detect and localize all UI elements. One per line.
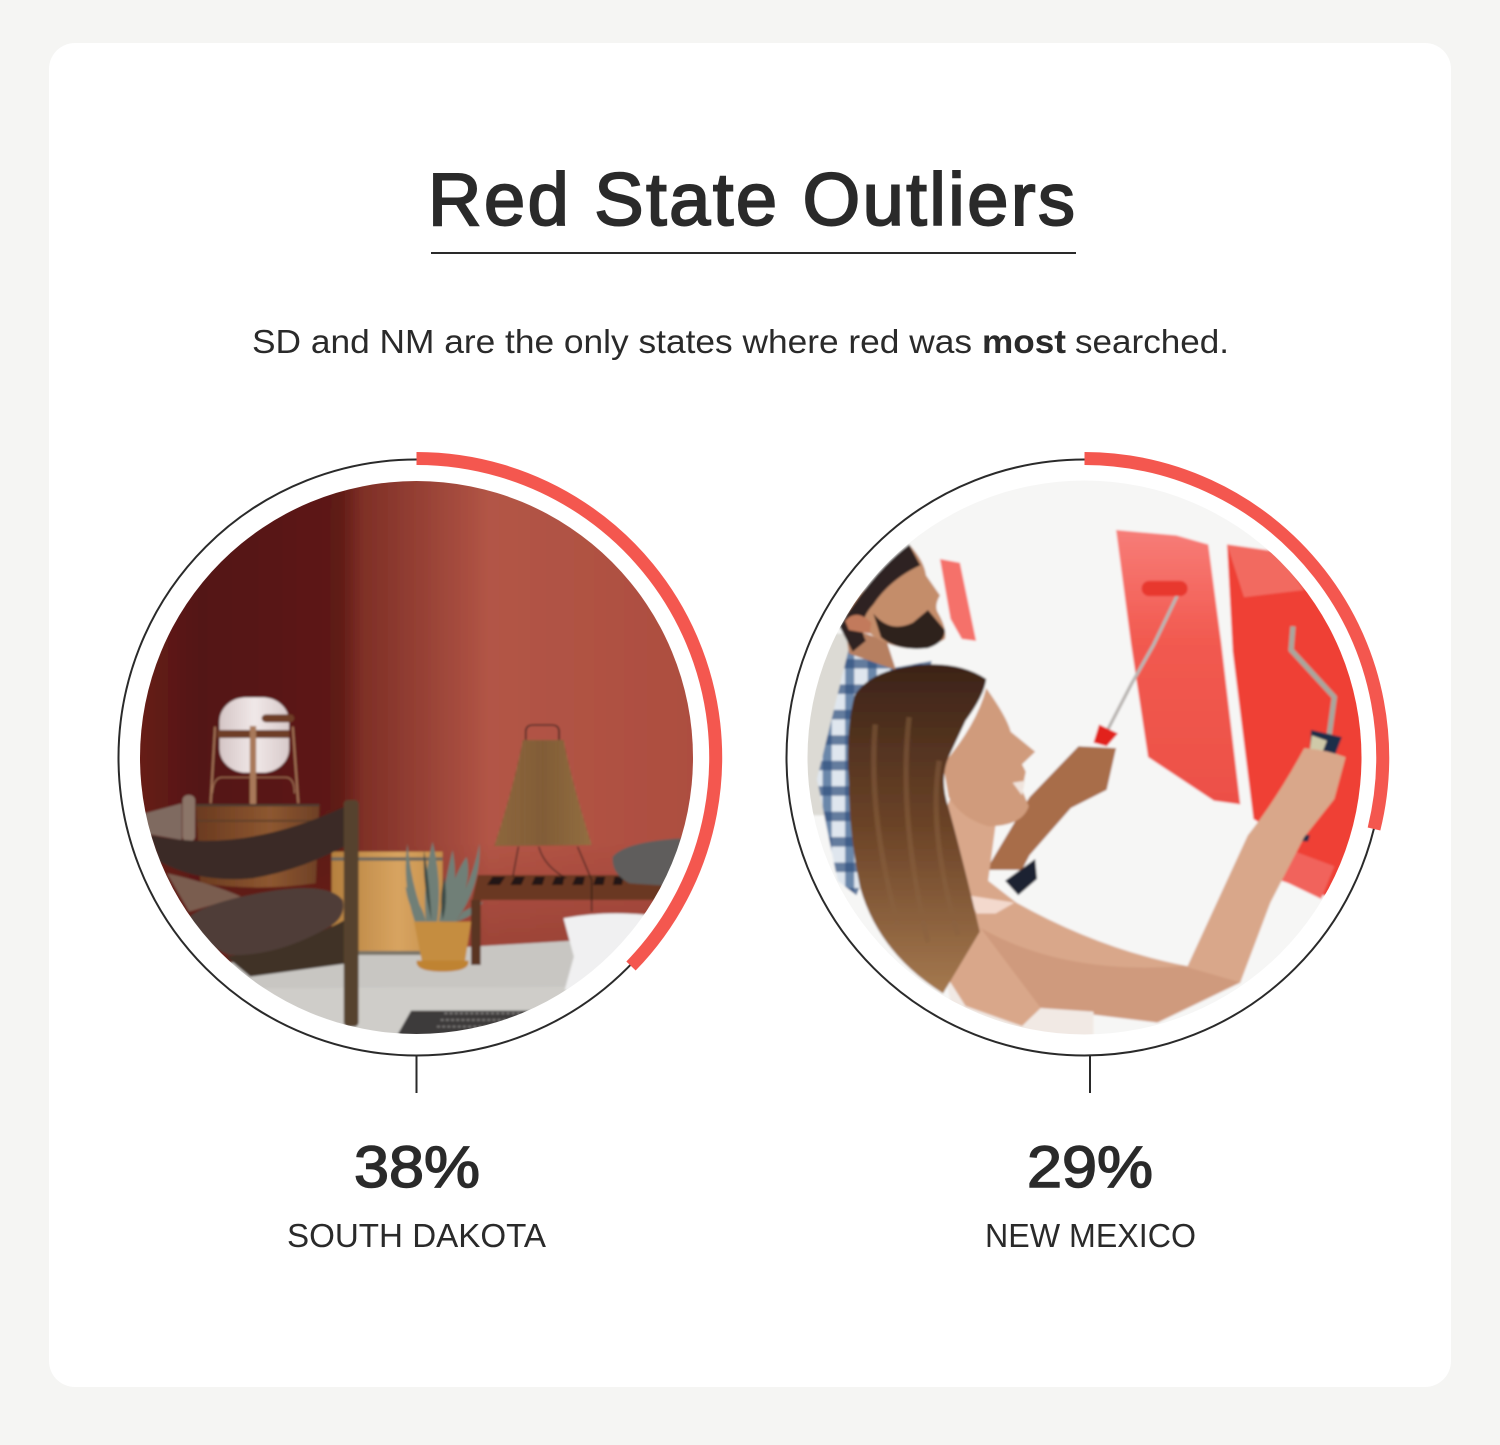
woman's top	[947, 981, 1095, 1034]
right paint patch	[1226, 544, 1362, 897]
subtitle	[252, 324, 1229, 361]
panel: New Mexico	[786, 458, 1390, 1254]
progress arc 29%	[1084, 458, 1383, 829]
man's neck	[845, 626, 896, 670]
man's arm	[986, 746, 1116, 870]
chair	[145, 803, 182, 840]
label New Mexico: NEW MEXICO	[985, 1217, 1196, 1254]
value 29%: 29%	[1027, 1135, 1153, 1200]
photo: red living room	[140, 481, 693, 1034]
roller: woman	[1291, 626, 1334, 739]
leader tick	[1089, 1056, 1091, 1093]
ring outline	[786, 460, 1382, 1056]
roller: man	[1107, 594, 1178, 732]
floor	[229, 939, 575, 990]
wooden barrel	[196, 805, 319, 887]
hair	[848, 664, 986, 993]
man's shirt	[817, 648, 932, 895]
leader tick	[416, 1056, 418, 1093]
subtitle: searched.	[1075, 324, 1229, 361]
drum	[332, 852, 443, 955]
white stool	[564, 913, 648, 990]
wall	[140, 481, 693, 964]
rug	[396, 1011, 533, 1037]
panel: South Dakota	[118, 458, 716, 1254]
woman's body and arm	[913, 748, 1346, 1026]
man's head	[841, 545, 945, 648]
wall	[814, 480, 1326, 1034]
photo: couple painting wall red	[800, 470, 1390, 1040]
terracotta pot	[414, 922, 471, 963]
small paint patch	[940, 559, 976, 641]
ring outline	[118, 460, 714, 1056]
woven lamp	[526, 725, 559, 740]
label South Dakota: SOUTH DAKOTA	[287, 1217, 546, 1254]
globe lamp	[220, 697, 289, 773]
progress arc 38%	[416, 458, 716, 966]
subtitle: most	[982, 324, 1066, 361]
subtitle: SD and NM are the only states where red was	[252, 324, 972, 361]
bench	[472, 875, 663, 900]
value 38%: 38%	[354, 1135, 480, 1200]
large paint patch	[1116, 530, 1240, 804]
title: Red State Outliers	[428, 158, 1075, 241]
cushion on bench	[613, 838, 681, 887]
woman's face	[943, 688, 1035, 826]
title underline	[431, 252, 1076, 254]
aloe plant	[406, 842, 483, 922]
